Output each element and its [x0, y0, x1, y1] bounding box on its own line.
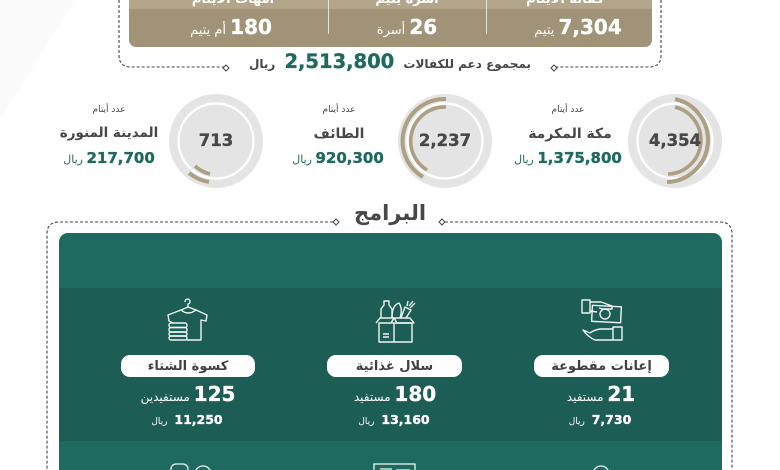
dark row band [59, 288, 722, 441]
heading: programs: البرامج [354, 201, 426, 225]
column divider [486, 0, 487, 34]
caption: عدد أيتام [92, 105, 126, 115]
pill: winter clothing: كسوة الشتاء [148, 359, 228, 374]
pill: winter clothing [121, 355, 255, 377]
icon: food box [376, 300, 416, 343]
pill: food baskets: سلال غذائية [356, 359, 433, 374]
city block: Madinah [60, 103, 158, 167]
stat: 180 mothers: 180 أم يتيم [190, 15, 272, 39]
amount: 11,250: 11,250 ريال [151, 412, 223, 427]
total support line: بمجموع دعم للكفالات 2,513,800 ريال [249, 50, 531, 73]
ring value: 713: 713 [199, 131, 233, 150]
panel: programs [59, 233, 722, 470]
caption: عدد أيتام [322, 105, 356, 115]
city name: المدينة المنورة [60, 125, 158, 141]
beneficiaries: 125: 125 مستفيدين [141, 382, 235, 406]
city block: Makkah [514, 103, 622, 167]
ring chart: Taif 2,237 [398, 94, 492, 188]
column divider [328, 0, 329, 34]
ring chart: Madinah 713 [169, 94, 263, 188]
amount: 217,700 ريال [63, 149, 155, 167]
pill: cash aid [534, 355, 669, 377]
icon: cash in hand [581, 299, 623, 341]
amount: 920,300 ريال [292, 149, 384, 167]
pill: food baskets [327, 355, 462, 377]
caption: عدد أيتام [552, 105, 584, 115]
amount: 13,160: 13,160 ريال [358, 412, 430, 427]
ring chart: Makkah 4,354 [628, 94, 722, 188]
diamond ornaments: total line [222, 64, 558, 72]
diamond ornaments: programs heading [332, 218, 446, 226]
pill: cash aid: إعانات مقطوعة [551, 359, 652, 374]
header band [129, 0, 652, 9]
beneficiaries: 21: 21 مستفيد [567, 382, 635, 406]
city name: الطائف [314, 126, 364, 142]
amount: 1,375,800 ريال [514, 149, 622, 167]
stat: 7,304 orphans: 7,304 يتيم [534, 15, 622, 39]
ring value: 4,354: 4,354 [649, 131, 701, 150]
city block: Taif [292, 103, 384, 167]
stat: 26 families: 26 أسرة [377, 15, 437, 39]
panel: orphan totals [129, 0, 652, 47]
ring value: 2,237: 2,237 [419, 131, 471, 150]
amount: 7,730: 7,730 ريال [569, 412, 631, 427]
beneficiaries: 180: 180 مستفيد [354, 382, 436, 406]
city name: مكة المكرمة [528, 126, 612, 142]
icon: clothes [167, 298, 208, 341]
